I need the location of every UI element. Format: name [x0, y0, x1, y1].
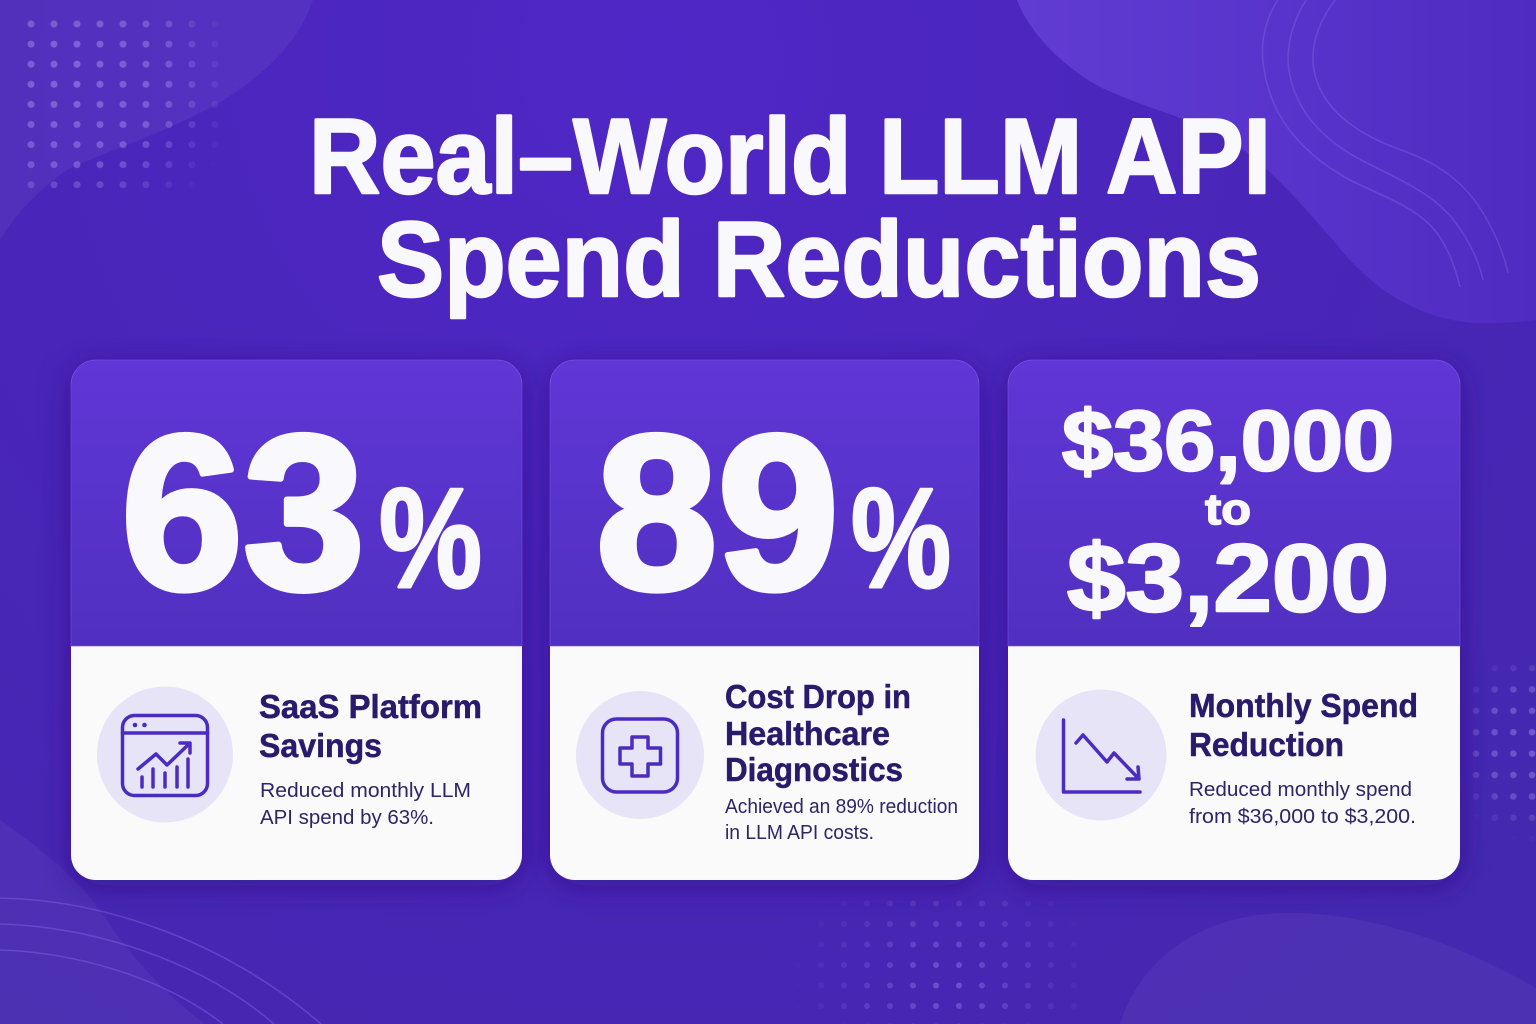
card text: Reduction — [1189, 726, 1344, 763]
card body — [1008, 360, 1460, 880]
card text: from $36,000 to $3,200. — [1189, 805, 1416, 828]
card text — [259, 688, 482, 829]
card header with 63% — [71, 360, 522, 646]
background shape: bottom left blob — [0, 820, 205, 1024]
background shape: top right wave lines — [1263, 0, 1508, 287]
card text: Savings — [259, 727, 382, 764]
icon: medical cross — [576, 691, 704, 819]
card text — [1189, 687, 1418, 828]
dot pattern: right edge — [1472, 665, 1536, 821]
title — [309, 96, 1271, 319]
background shape: bottom left arcs — [0, 898, 321, 1024]
card text: Achieved an 89% reduction — [725, 795, 958, 818]
card text: Reduced monthly LLM — [260, 779, 471, 802]
card text: Reduced monthly spend — [1189, 778, 1412, 801]
card text: API spend by 63%. — [260, 806, 434, 829]
card text: Cost Drop in — [725, 678, 911, 715]
card header with 89%: % — [851, 459, 951, 618]
background shape: top right blob — [1017, 0, 1536, 323]
card header with dollar figures: $36,000 — [1062, 394, 1394, 489]
panel: SaaS platform savings — [71, 360, 522, 880]
title: Spend Reductions — [377, 199, 1261, 319]
card header with 63%: % — [379, 459, 482, 618]
card text: in LLM API costs. — [725, 821, 874, 844]
background shape: top left blob — [0, 0, 313, 240]
card text — [725, 678, 958, 844]
card text: Diagnostics — [725, 751, 903, 788]
card body — [71, 360, 522, 880]
panel: monthly spend reduction — [1008, 360, 1460, 880]
card header with dollar figures: to — [1205, 485, 1251, 534]
card header with 89% — [550, 360, 979, 646]
icon: browser window with rising chart — [97, 686, 233, 822]
card text: Monthly Spend — [1189, 687, 1418, 724]
card text: Healthcare — [725, 715, 890, 752]
card header with dollar figures: $3,200 — [1067, 525, 1389, 632]
card header with dollar figures — [1008, 360, 1460, 646]
card header with 89%: 89 — [596, 390, 839, 636]
icon: declining line chart — [1036, 690, 1166, 820]
panel: healthcare diagnostics cost drop — [550, 360, 979, 880]
card header with 63%: 63 — [121, 390, 365, 636]
background shape: bottom right blob — [1120, 913, 1536, 1024]
dot pattern: top left — [28, 20, 218, 188]
card text: SaaS Platform — [259, 688, 482, 725]
card body — [550, 360, 979, 880]
title: Real–World LLM API — [309, 96, 1271, 216]
dot pattern: bottom centre — [822, 900, 1054, 1024]
